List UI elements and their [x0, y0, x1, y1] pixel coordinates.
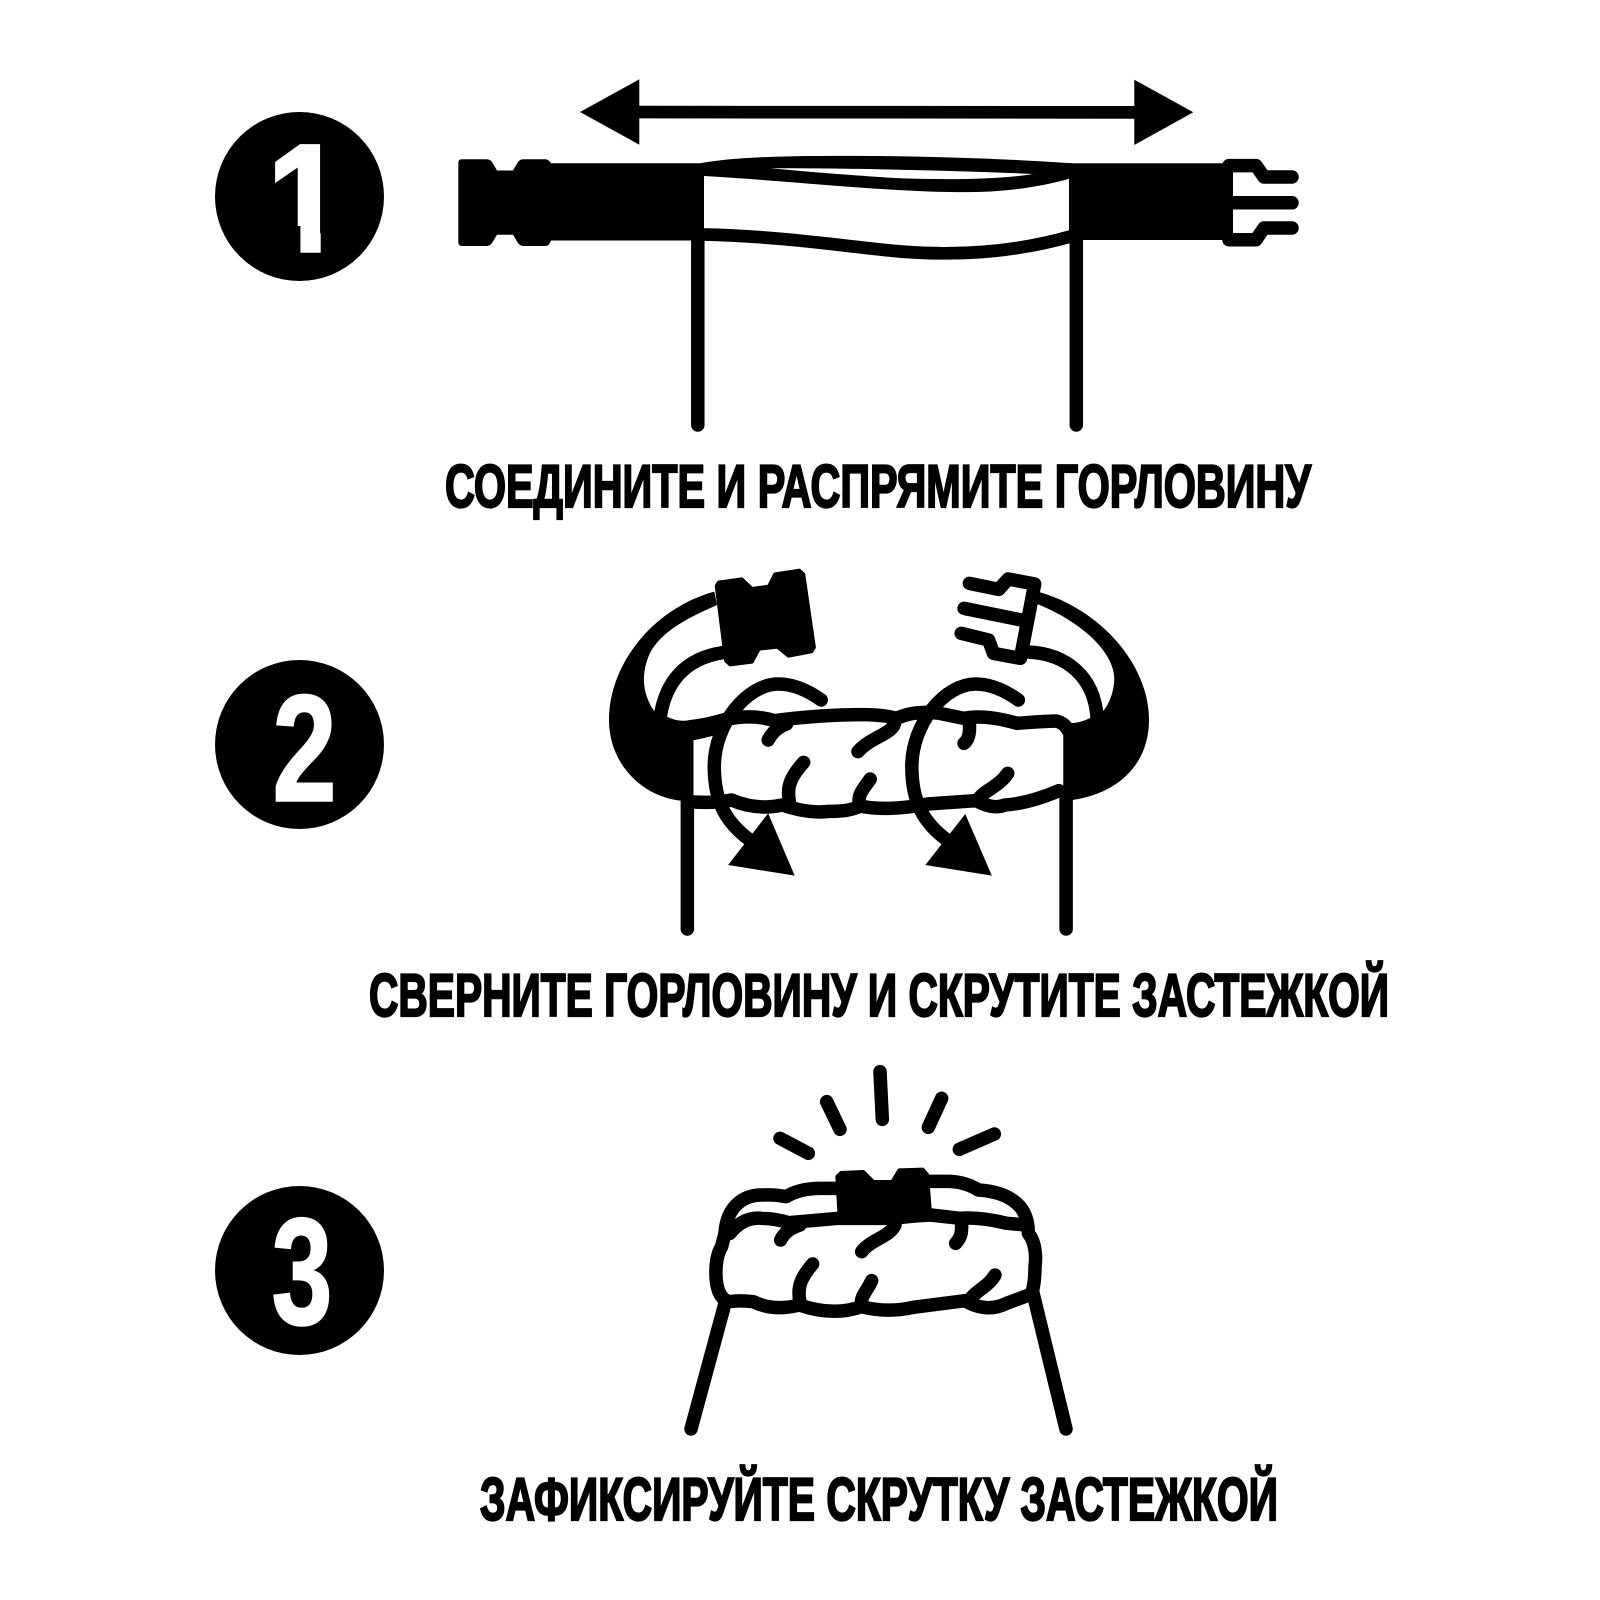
right strap crescent: [1036, 592, 1149, 801]
right buckle outline: [961, 579, 1035, 658]
left inner strand: [660, 653, 722, 718]
step 3 number badge: 3: [272, 1187, 332, 1357]
step 2 number badge: 2: [272, 663, 337, 833]
icon: double-headed arrow: [580, 79, 1193, 145]
roll folds: [781, 1225, 995, 1305]
step 2 illustration: roll and twist the neck: [609, 571, 1149, 929]
right inner strand: [1027, 652, 1097, 718]
roll inner top edge: [730, 1215, 1027, 1233]
click rays: [780, 1072, 994, 1153]
roll bottom edge: [728, 1294, 1032, 1311]
neck stands: [687, 798, 1066, 929]
step 3 number badge: [215, 1186, 384, 1357]
rolled neck lower-left edge: [693, 726, 721, 733]
step 1 illustration: straighten the neck: [458, 79, 1292, 425]
left buckle: [717, 571, 814, 664]
right buckle prongs: [1222, 163, 1292, 240]
rolled neck top edge: [665, 712, 1095, 730]
roll left edge: [716, 1233, 728, 1302]
twist arrow left: [714, 684, 821, 876]
left buckle and strap: [458, 156, 1072, 246]
step 2 number badge: [215, 660, 384, 833]
lower neck strand: [704, 234, 1072, 253]
twist arrow right: [912, 684, 1018, 876]
step 1 number badge: [215, 112, 384, 283]
neck opening: lens highlight: [770, 168, 1033, 179]
neck folds: [768, 720, 1008, 803]
step 1 number badge: 1: [268, 113, 344, 283]
rolled neck bottom edge: [693, 791, 1059, 812]
neck stands: [691, 1292, 1066, 1429]
right strap block: [1069, 163, 1225, 240]
neck stands: [698, 240, 1076, 425]
closed buckle: [837, 1170, 930, 1222]
roll outer outline: [725, 1181, 1036, 1293]
step 3 illustration: secure the roll with the buckle: [691, 1072, 1066, 1429]
left strap crescent: [609, 592, 717, 801]
